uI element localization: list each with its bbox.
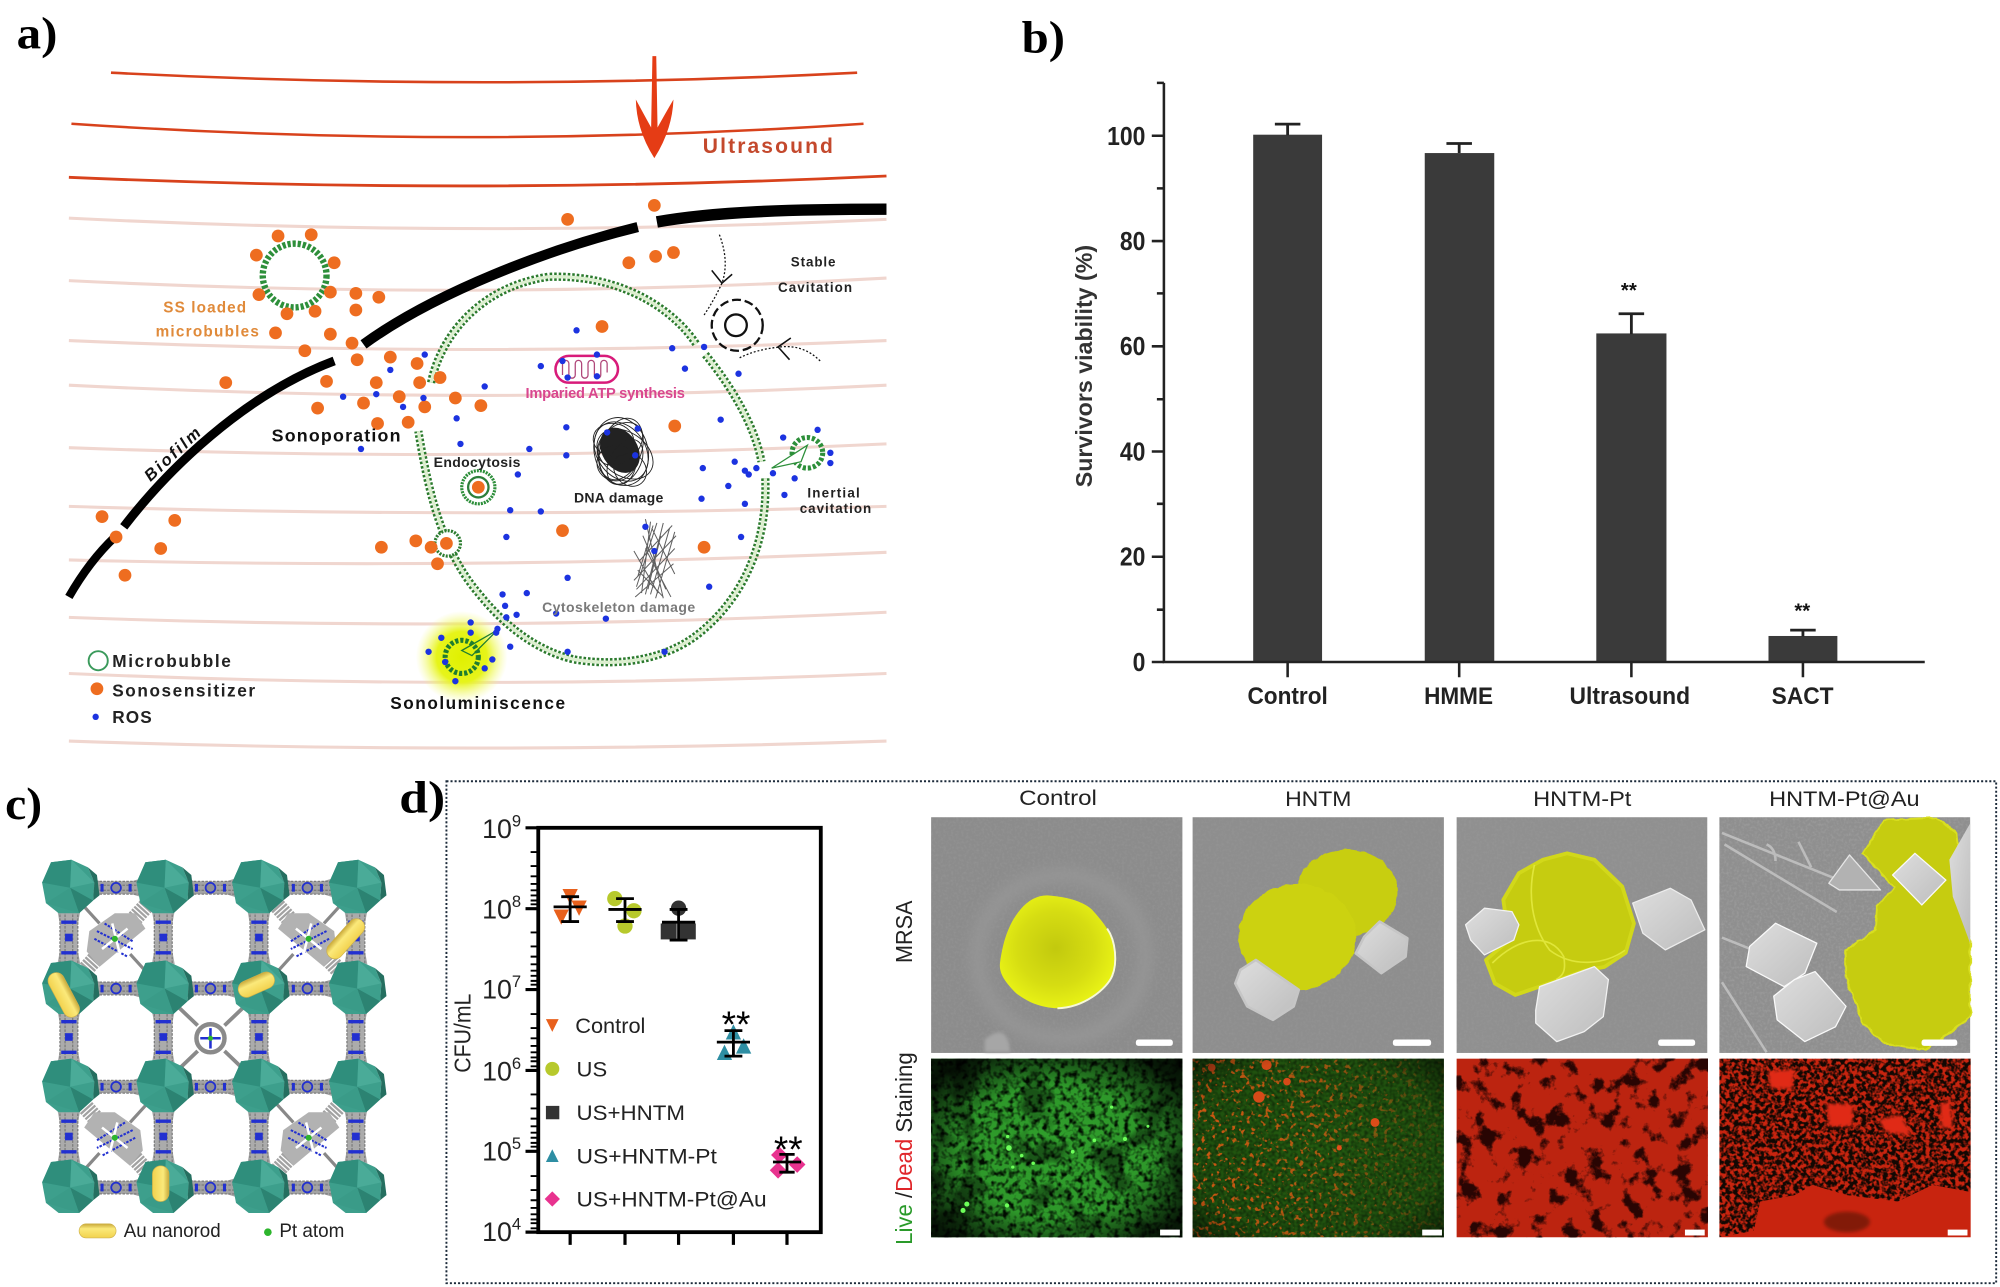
fluorescence image: HNTM-Pt: [1457, 1059, 1708, 1237]
dotted panel frame: [446, 781, 1996, 1283]
label: SS loaded microbubbles: microbubles: [156, 324, 259, 341]
sonosensitizer dots: [96, 199, 710, 582]
y axis numbers: 40: [1120, 438, 1145, 466]
label: DNA damage: DNA damage: [574, 490, 663, 506]
y axis numbers: 10: [482, 1137, 512, 1167]
gold nanorods: [45, 915, 368, 1202]
label: ultrasound: Ultrasound: [703, 135, 833, 158]
legend: ROS: [112, 707, 152, 727]
significance stars: **: [1621, 280, 1637, 302]
y axis numbers: 7: [512, 972, 521, 991]
x axis labels: Control: [1247, 683, 1328, 710]
label: inertial cavitation: cavitation: [800, 501, 871, 516]
y axis numbers: [482, 812, 521, 1247]
data: US: [607, 891, 642, 934]
column headings: [1019, 785, 1920, 811]
inertial cavitation bubble: [772, 438, 823, 468]
panel d: antibacterial results: [399, 772, 1996, 1283]
significance stars: US+HNTM-Pt@Au: **: [774, 1129, 803, 1170]
attenuated tissue waves: [69, 218, 886, 748]
SEM image: control: [931, 817, 1182, 1053]
SEM image: HNTM-Pt: [1457, 817, 1707, 1053]
label: endocytosis: Endocytosis: [434, 454, 521, 470]
panel label a: a): [17, 7, 57, 58]
significance stars: [1621, 280, 1810, 622]
SEM image: HNTM: [1193, 817, 1444, 1053]
y axis title: Survivors viability (%): [1071, 245, 1097, 487]
label: cytoskeleton damage: Cytoskeleton damage: [542, 599, 695, 615]
y axis numbers: 20: [1120, 544, 1145, 572]
label: stable cavitation: Cavitation: [778, 280, 852, 295]
biofilm layer: [69, 209, 886, 597]
y axis numbers: 0: [1133, 649, 1145, 677]
y axis numbers: 10: [482, 894, 512, 924]
data: US+HNTM-Pt@Au: [770, 1147, 805, 1179]
fluorescence image: control: [931, 1059, 1182, 1237]
framework lattice: [42, 860, 386, 1213]
label: stable cavitation: Stable: [791, 255, 835, 270]
y axis numbers: 100: [1107, 123, 1145, 151]
x axis labels: SACT: [1772, 683, 1834, 710]
chart legend: Control: [575, 1013, 645, 1038]
ultrasound wave fronts: [69, 73, 886, 186]
data: US+HNTM: [661, 901, 696, 940]
SEM image: HNTM-Pt@Au: [1719, 817, 1970, 1053]
label: sonoporation: Sonoporation: [272, 425, 401, 445]
y axis numbers: 6: [512, 1054, 521, 1073]
arrow: ultrasound direction: [636, 56, 673, 158]
label: inertial cavitation: Inertial: [807, 485, 860, 500]
significance stars: **: [1794, 600, 1810, 622]
error bars: [1275, 124, 1816, 636]
panel label d: d): [399, 772, 445, 823]
label: biofilm: Biofilm: [140, 423, 205, 485]
y axis numbers: 8: [512, 892, 521, 911]
data: control: [554, 889, 587, 925]
icon: damaged DNA tangle: [583, 411, 663, 493]
y axis numbers: 9: [512, 812, 521, 831]
legend: Au nanorod and Pt atom: Pt atom: [279, 1221, 344, 1242]
x axis labels: [1247, 683, 1834, 710]
y axis numbers: 10: [482, 814, 512, 844]
data: US+HNTM-Pt: [717, 1024, 751, 1060]
yellow sonoluminescence glow: [416, 611, 508, 703]
chart legend: US+HNTM: [577, 1100, 685, 1125]
row label: Live/Dead staining: Live /Dead Staining: [891, 1052, 917, 1245]
legend: [89, 651, 255, 727]
microbubble loaded with sonosensitizer: [263, 244, 327, 307]
chart legend: [545, 1013, 767, 1212]
panel a: ultrasound mechanism diagram: [17, 7, 886, 748]
icon: broken cytoskeleton fibres: [634, 519, 676, 598]
legend: Au nanorod and Pt atom: [79, 1221, 344, 1242]
budding vesicle on membrane: [435, 531, 460, 556]
fluorescence image: HNTM-Pt@Au: [1719, 1059, 1971, 1237]
panel c: MOF framework structure: [5, 778, 386, 1242]
chart legend: US+HNTM-Pt@Au: [577, 1187, 767, 1212]
column headings: Control: [1019, 785, 1097, 810]
panel label c: c): [5, 778, 42, 829]
y axis numbers: 4: [512, 1215, 521, 1234]
bars: [1253, 135, 1837, 662]
CFU scatter chart: [450, 812, 821, 1247]
row label: MRSA: MRSA: [891, 900, 917, 963]
icon: mitochondrion: [555, 356, 618, 383]
panel label b: b): [1022, 11, 1065, 62]
legend: Microbubble: [112, 651, 231, 671]
column headings: HNTM: [1285, 786, 1351, 811]
y axis numbers: 10: [482, 975, 512, 1005]
significance stars: US+HNTM-Pt: **: [722, 1004, 750, 1045]
y axis numbers: [1107, 123, 1145, 677]
chart frame and ticks: [526, 828, 821, 1245]
y axis numbers: 60: [1120, 333, 1145, 361]
column headings: HNTM-Pt@Au: [1769, 786, 1920, 811]
legend: Au nanorod and Pt atom: Au nanorod: [124, 1221, 221, 1242]
y axis title: CFU/mL: [450, 994, 476, 1073]
cell membrane: [418, 277, 765, 662]
y axis numbers: 10: [482, 1056, 512, 1086]
label: sonoluminiscence: Sonoluminiscence: [390, 693, 565, 713]
y axis numbers: 80: [1120, 228, 1145, 256]
legend: Sonosensitizer: [112, 680, 255, 700]
ROS dots: [340, 327, 834, 684]
x axis labels: HMME: [1424, 683, 1493, 710]
label: impaired ATP synthesis: Imparied ATP synthesis: [526, 386, 685, 402]
fluorescence image: HNTM: [1193, 1059, 1444, 1237]
y axis numbers: 10: [482, 1217, 512, 1247]
y axis numbers: 5: [512, 1134, 521, 1153]
x axis labels: Ultrasound: [1570, 683, 1690, 710]
chart legend: US+HNTM-Pt: [577, 1143, 717, 1168]
panel b: bar chart of survivors viability: [1022, 11, 1925, 710]
axes and ticks: [1152, 83, 1925, 677]
sonoluminescence bubble: [445, 630, 497, 673]
chart legend: US: [577, 1057, 607, 1082]
endocytosis vesicle: [462, 471, 495, 504]
column headings: HNTM-Pt: [1533, 786, 1631, 811]
stable cavitation diagram: [704, 235, 820, 361]
label: SS loaded microbubbles: SS loaded: [163, 300, 246, 317]
